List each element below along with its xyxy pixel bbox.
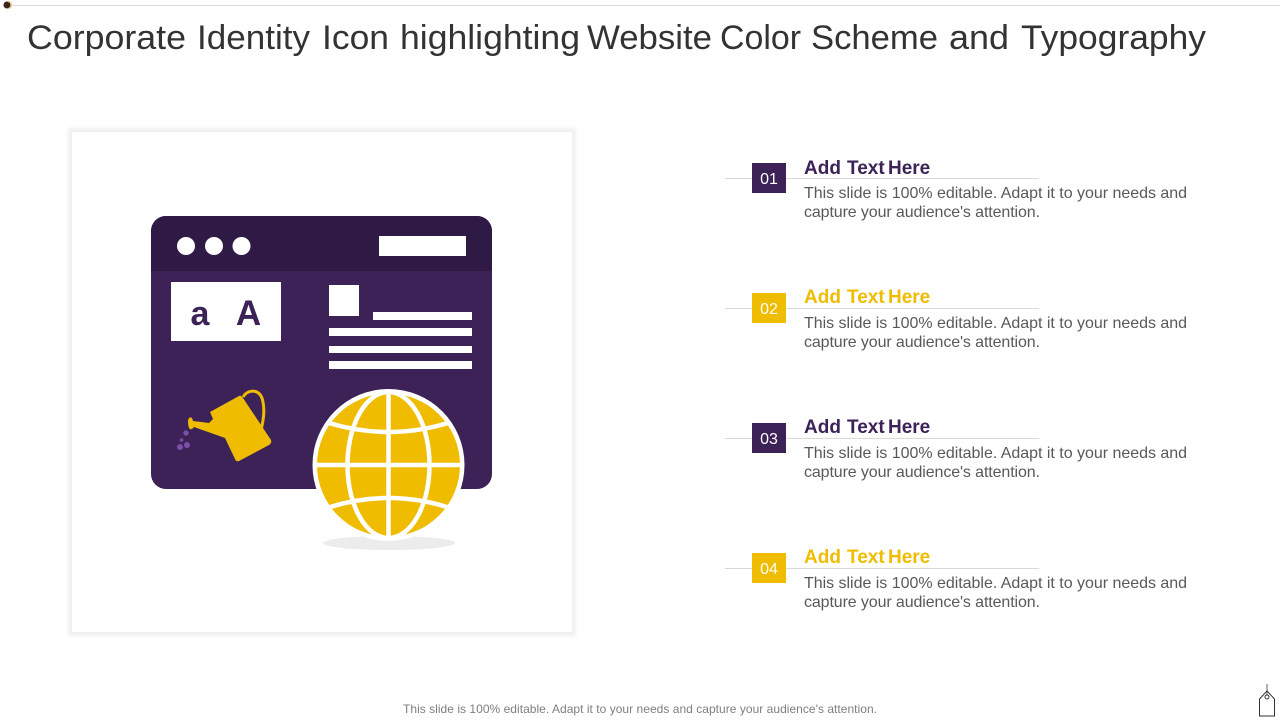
list item 04: 04 <box>760 561 778 578</box>
panel: illustration card <box>68 128 576 636</box>
typography sample box <box>171 282 281 341</box>
typography sample box: a <box>191 295 211 333</box>
list item 02: Text <box>847 287 885 308</box>
title: highlighting <box>400 19 580 57</box>
list item 04: capture your audience's attention. <box>804 594 1040 611</box>
list item 02 <box>725 287 1187 351</box>
list item 03: capture your audience's attention. <box>804 464 1040 481</box>
title: Scheme <box>811 19 938 57</box>
list item 04: Text <box>847 547 885 568</box>
globe shadow <box>323 536 455 550</box>
list item 04: Here <box>888 547 930 568</box>
list item 01: Here <box>888 158 930 179</box>
title: Identity <box>197 19 310 57</box>
title: and <box>949 19 1009 57</box>
list item 01: 01 <box>760 171 778 188</box>
list item 02: 02 <box>760 301 778 318</box>
browser window <box>151 216 492 489</box>
list item 01: capture your audience's attention. <box>804 204 1040 221</box>
list item 01: Add <box>804 158 841 179</box>
list item 01 <box>725 158 1187 221</box>
list item 02: This slide is 100% editable. Adapt it to your needs and <box>804 315 1187 332</box>
title: Color <box>720 19 801 57</box>
icon: globe <box>312 389 464 541</box>
list item 01: Text <box>847 158 885 179</box>
list item 02: capture your audience's attention. <box>804 334 1040 351</box>
list item 03: Text <box>847 417 885 438</box>
list item 04: This slide is 100% editable. Adapt it to your needs and <box>804 575 1187 592</box>
list item 02: Add <box>804 287 841 308</box>
list item 03: Here <box>888 417 930 438</box>
icon: watering can <box>177 391 271 461</box>
list item 03: This slide is 100% editable. Adapt it to your needs and <box>804 445 1187 462</box>
footer note: This slide is 100% editable. Adapt it to your needs and capture your audience's attention. <box>403 702 877 716</box>
list item 03: 03 <box>760 431 778 448</box>
title <box>27 19 1206 57</box>
list item 04: Add <box>804 547 841 568</box>
top rule with marker <box>4 2 1280 8</box>
typography sample box: A <box>236 294 261 333</box>
title: Corporate <box>27 19 186 57</box>
title: Website <box>587 19 712 57</box>
list item 03: Add <box>804 417 841 438</box>
title: Typography <box>1021 19 1206 57</box>
list item 04 <box>725 547 1187 611</box>
list item 01: This slide is 100% editable. Adapt it to your needs and <box>804 185 1187 202</box>
icon: price tag <box>1260 684 1274 716</box>
title: Icon <box>322 19 389 57</box>
list item 03 <box>725 417 1187 481</box>
list item 02: Here <box>888 287 930 308</box>
